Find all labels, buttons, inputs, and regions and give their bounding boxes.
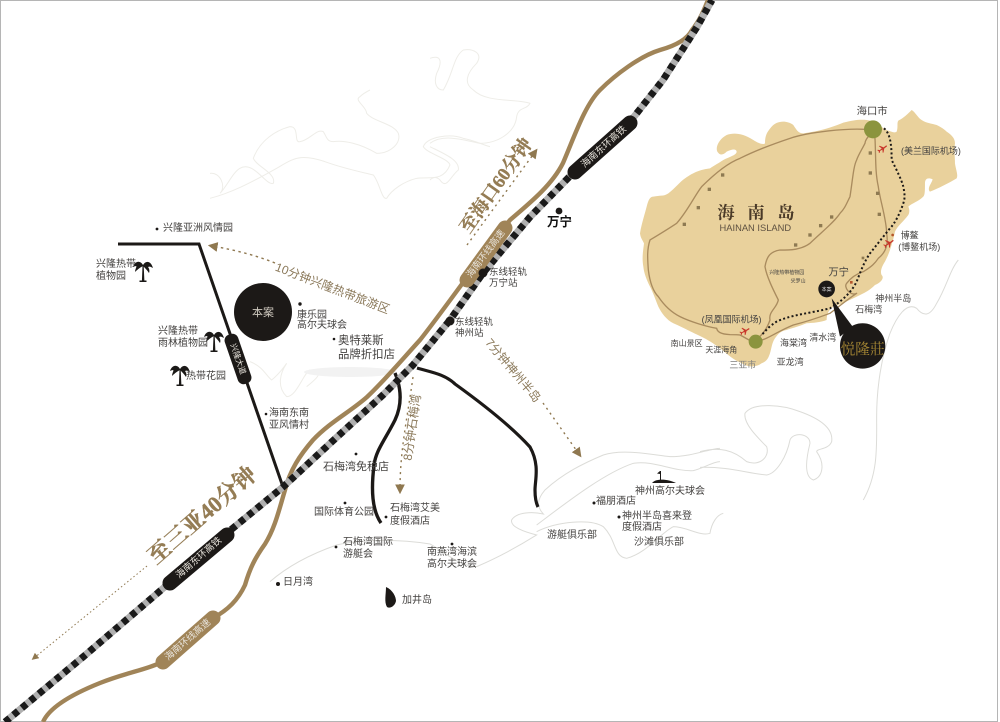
dotted rail [762,128,905,335]
island labels: 万宁 [828,265,849,278]
junction markers [683,151,894,284]
heading: to Haikou 60 minutes: 至海口60分钟 [455,134,537,237]
road: Shimei Bay branch [372,373,400,523]
label: 10 minutes: 10分钟兴隆热带旅游区 [273,259,392,317]
map point labels: 日月湾 [283,575,313,588]
map point labels: 高尔夫球会 [297,318,347,331]
map point labels: 沙滩俱乐部 [634,535,684,548]
map point labels: 热带花园 [186,369,226,382]
arrow: to Shimei Bay [400,377,413,490]
project circle: 本案 [252,305,274,319]
map point labels: 国际体育公园 [314,505,374,518]
map point labels: 兴隆亚洲风情园 [163,221,233,234]
map point labels: 福朋酒店 [596,494,636,507]
map point labels: 万宁 [547,214,572,229]
map point labels: 度假酒店 [390,514,430,527]
island labels: 海口市 [857,105,888,118]
island labels: 南山景区 [671,338,703,348]
island labels [671,105,961,370]
island title [717,203,807,233]
map point labels: 东线轻轨 [489,266,528,278]
map point labels: 亚风情村 [269,418,309,431]
faint coastlines [210,50,958,582]
island labels: 天涯海角 [705,344,737,354]
pill: HSR label upper: 海南东环高铁 [578,123,629,170]
pointer to project [832,298,853,337]
palm icons [133,262,224,386]
map point labels: 游艇会 [343,547,373,560]
island labels: 亚龙湾 [777,356,804,367]
island labels: 三亚市 [729,359,756,370]
island labels: 石梅湾 [855,303,882,314]
railway: Hainan East Ring HSR [5,0,712,722]
arrow: to Haikou [467,152,535,245]
island labels: 尖罗山 [791,278,806,285]
arrow: to Sanya [34,566,147,658]
pill: Xinglong road label: 兴隆大道 [229,342,248,376]
city: Haikou [864,120,882,138]
blur patch [304,367,396,377]
map point labels: 东线轻轨 [455,316,494,328]
project circle [234,283,292,341]
map point labels: 万宁站 [489,277,518,289]
map point labels: 神州高尔夫球会 [635,484,705,497]
map point labels: 兴隆热带 [158,324,198,337]
road: Shenzhou branch [417,368,538,507]
map point labels: 兴隆热带 [96,257,136,270]
island labels: (博鳌机场) [898,241,940,252]
city: Sanya [749,335,763,349]
icon: Jiajing island [385,587,396,608]
pill: expressway label upper: 海南环线高速 [464,227,508,280]
map point labels: 加井岛 [402,593,432,606]
panel: Hainan island map [640,105,961,370]
icon: golf flag [652,471,676,483]
pill: expressway label lower: 海南环线高速 [162,616,213,663]
road: Xinglong black road [118,244,283,487]
map point labels: 石梅湾国际 [343,535,393,548]
island labels: 博鳌 [901,230,919,241]
map point labels: 石梅湾免税店 [323,459,389,473]
map point labels: 神州站 [455,327,484,339]
heading: to Sanya 40 minutes: 至三亚40分钟 [143,462,261,569]
map point labels: 奥特莱斯 [338,333,384,347]
map point labels [96,208,705,606]
map point labels: 康乐园 [297,308,327,321]
highway: Hainan ring expressway [43,0,708,722]
map point labels: 高尔夫球会 [427,557,477,570]
island labels: (凤凰国际机场) [702,314,762,325]
brand circle [840,323,885,369]
brand circle: 悦隆莊 [841,341,885,358]
map point labels: 游艇俱乐部 [547,528,597,541]
pill: HSR label lower: 海南东环高铁 [173,534,224,581]
map point labels: 石梅湾艾美 [390,501,440,514]
map point labels: 神州半岛喜来登 [622,509,692,522]
island shape [640,110,957,366]
island labels: 清水湾 [809,332,836,343]
island labels: 兴隆热带植物园 [769,269,804,276]
map point labels: 植物园 [96,269,126,282]
arrow: to Shenzhou Peninsula [543,403,579,454]
map point labels: 品牌折扣店 [338,347,395,361]
island roads [648,129,887,342]
map point labels: 海南东南 [269,406,309,419]
small project circle: 本案 [822,286,832,293]
arrow: to Xinglong [212,246,275,263]
island title: HAINAN ISLAND [720,223,791,233]
map point labels: 雨林植物园 [158,336,208,349]
label: 8 minutes: 8分钟石梅湾 [399,393,424,461]
label: 7 minutes: 7分钟神州半岛 [482,335,544,405]
planes [738,143,896,337]
map point labels: 南燕湾海滨 [427,545,477,558]
small project circle [818,281,835,297]
map point labels: 度假酒店 [622,520,662,533]
island labels: (美兰国际机场) [901,145,961,156]
pill: Xinglong road label [223,332,253,386]
island title: 海南岛 [717,203,807,223]
island labels: 海棠湾 [780,337,807,348]
island labels: 神州半岛 [875,292,911,303]
